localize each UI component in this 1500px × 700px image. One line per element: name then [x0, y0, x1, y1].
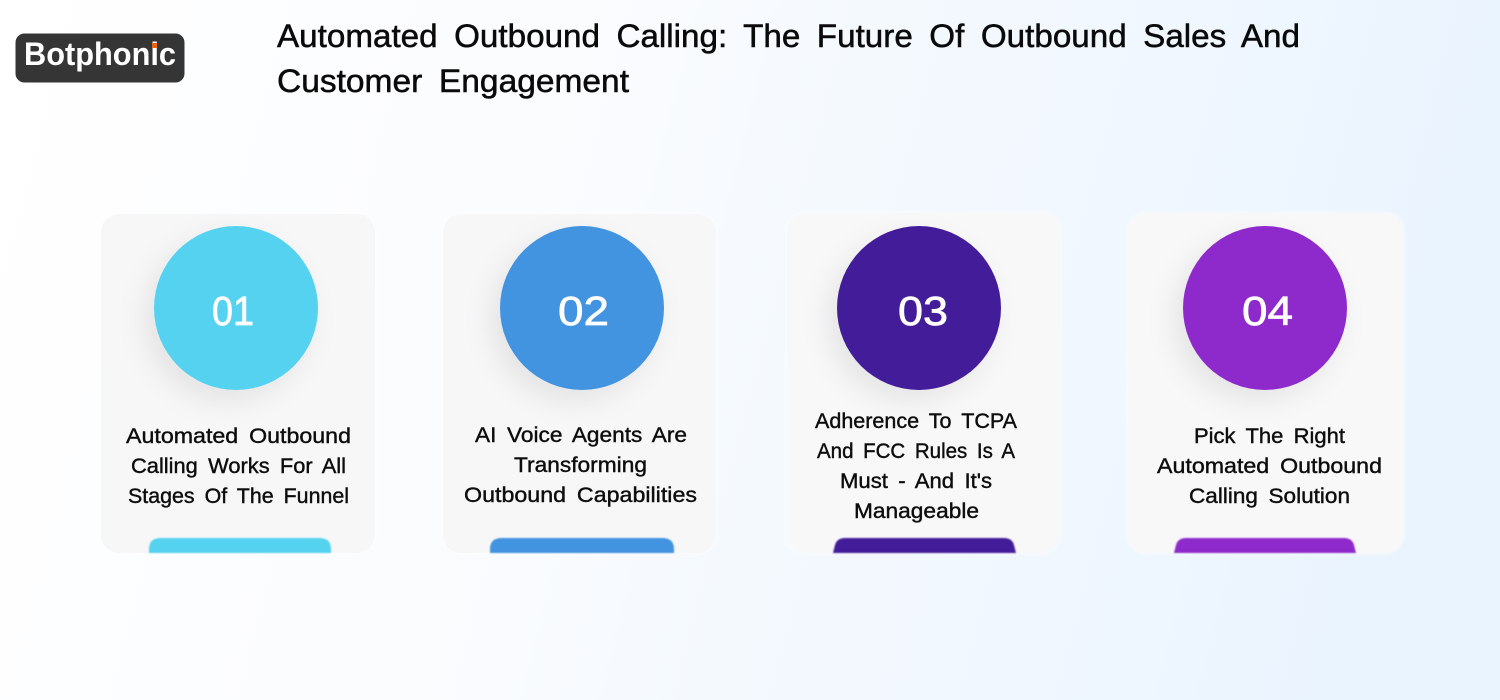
title: Automated Outbound Calling: The Future Of Outbound Sales And [277, 18, 1300, 54]
text: card 02 label [464, 424, 697, 507]
bar 02 [490, 538, 674, 553]
title [277, 18, 1300, 99]
circle 03: 03 [898, 288, 948, 334]
text: card 03 label: Adherence To TCPA [815, 410, 1017, 433]
text: card 01 label: Calling Works For All [131, 455, 346, 478]
text: card 04 label: Automated Outbound [1157, 455, 1382, 478]
text: card 03 label [815, 410, 1017, 523]
panel: card 01 [101, 214, 375, 553]
circle 03 [837, 226, 1001, 390]
bar 01 [149, 538, 331, 553]
text: card 02 label: AI Voice Agents Are [475, 424, 687, 447]
panel: card 02 [443, 214, 716, 553]
text: card 04 label [1157, 425, 1382, 508]
circle 04 [1183, 226, 1347, 390]
text: card 01 label [126, 425, 351, 508]
title: Customer Engagement [277, 63, 629, 99]
text: card 04 label: Pick The Right [1194, 425, 1345, 448]
text: card 03 label: Must - And It's [840, 470, 992, 493]
text: card 01 label: Automated Outbound [126, 425, 351, 448]
circle 02: 02 [558, 288, 609, 334]
logo: Botphonic [16, 34, 184, 82]
text: card 02 label: Transforming [514, 454, 647, 477]
logo: Botphonic: Botphonic [24, 36, 176, 72]
text: card 04 label: Calling Solution [1189, 485, 1350, 508]
bar 04 [1174, 538, 1356, 553]
icon: orange dot on the i [152, 43, 157, 48]
text: card 01 label: Stages Of The Funnel [128, 485, 349, 508]
text: card 03 label: Manageable [854, 500, 979, 523]
text: card 03 label: And FCC Rules Is A [817, 440, 1015, 463]
circle 02 [500, 226, 664, 390]
panel: card 04 [1128, 213, 1403, 553]
bar 03 [833, 538, 1016, 553]
text: card 02 label: Outbound Capabilities [464, 484, 697, 507]
circle 04: 04 [1242, 288, 1293, 334]
circle 01 [154, 226, 318, 390]
panel: card 03 [787, 213, 1060, 553]
circle 01: 01 [212, 288, 254, 334]
